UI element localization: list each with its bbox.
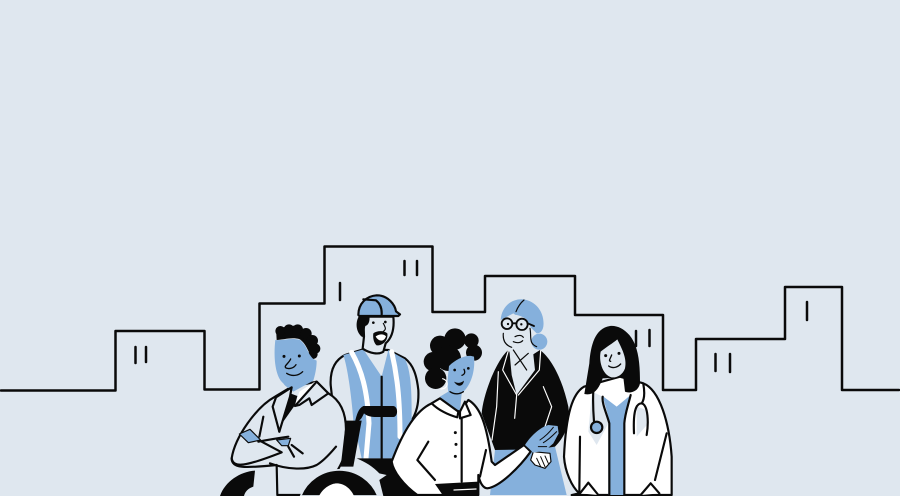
hair [501,299,544,333]
crossed hands [239,429,291,446]
hard hat [358,295,400,316]
left small wheel [220,471,255,496]
face [600,339,626,377]
curly hair [424,328,482,389]
neck and face [440,356,474,412]
face [504,315,531,345]
hair [275,324,320,359]
person: woman in wheelchair [392,328,559,496]
scrubs [603,395,631,495]
stethoscope [593,384,648,435]
wheelchair back and handle [341,406,397,467]
blue hand [525,425,559,453]
worker head [363,317,394,353]
blouse [509,348,535,395]
trousers [357,458,447,496]
buttons [454,431,457,458]
face [275,339,317,392]
wheelchair [301,406,447,496]
belt [435,482,478,496]
shirt and tie [295,382,317,405]
glasses [502,318,534,330]
ear [441,379,447,389]
collar [432,398,471,418]
clasped white hand [531,452,551,468]
worker body [331,349,418,423]
safety vest [343,349,412,458]
lapels [273,382,328,432]
hair [584,326,640,394]
lapel lines [492,351,552,440]
person: construction worker [331,295,418,458]
hands [580,483,659,495]
white coat [564,377,672,495]
blazer [482,350,569,450]
skirt [490,447,567,495]
person: man in lab coat [220,324,346,496]
coat [232,382,346,495]
person: female doctor [564,326,672,495]
person: old woman in blazer [482,299,569,495]
shirt and arm [392,400,531,495]
large wheel [301,470,378,496]
skyline [1,246,899,390]
coat shading [588,392,648,445]
